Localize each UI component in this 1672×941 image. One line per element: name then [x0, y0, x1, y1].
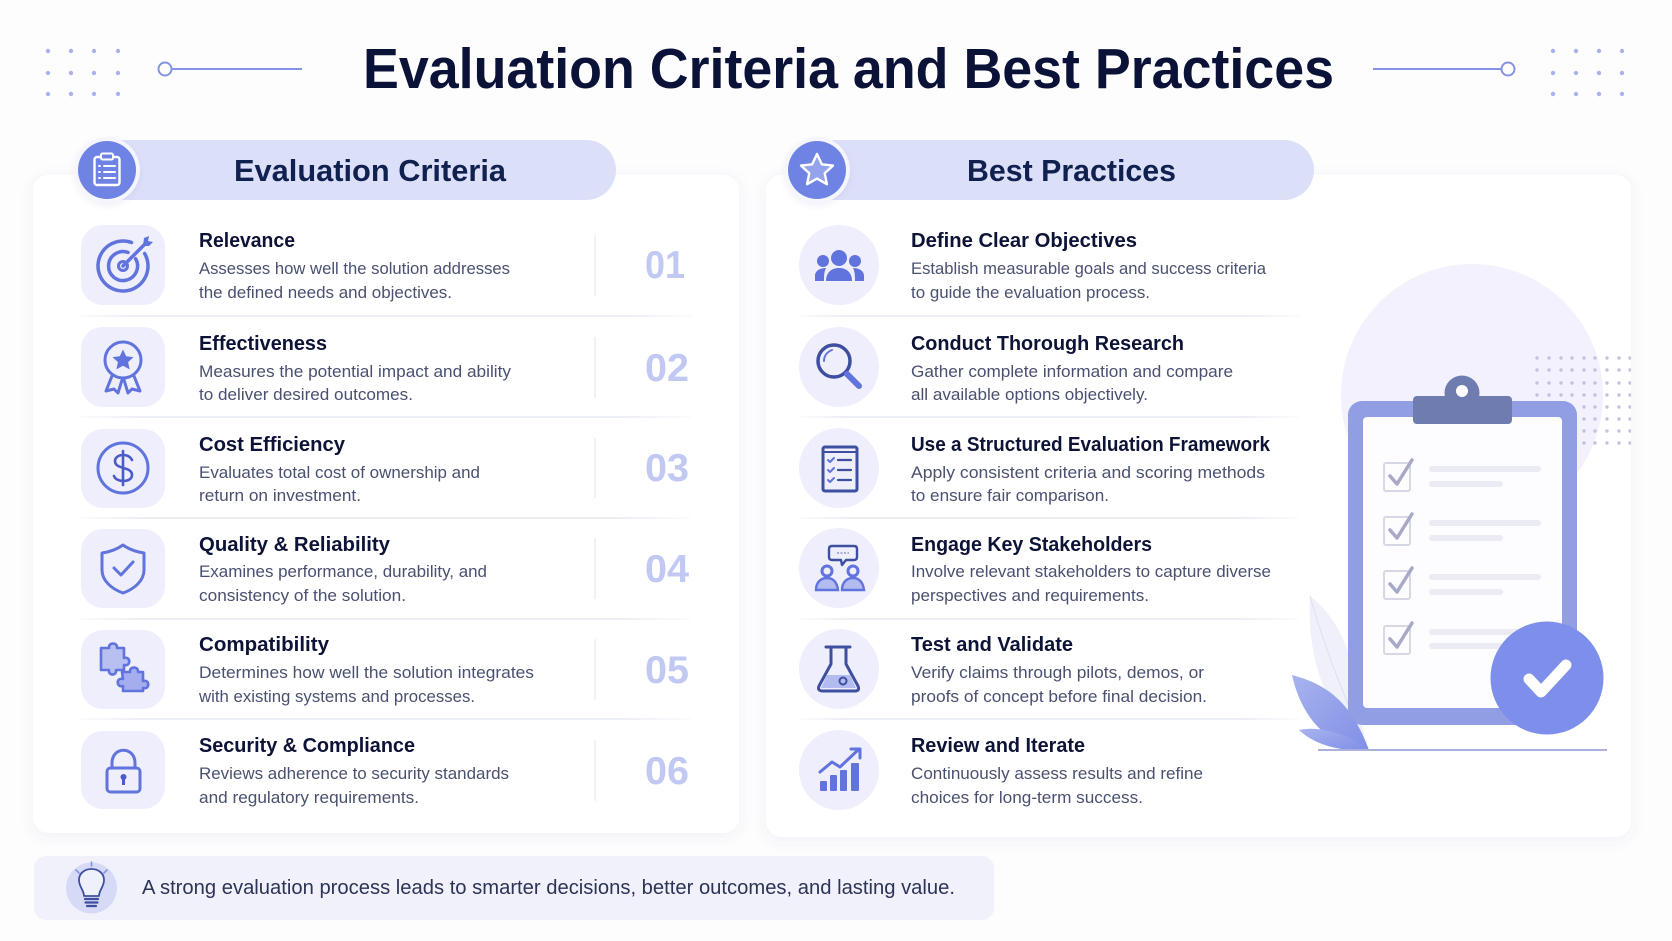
criterion: compatibility: Determines how well the solution integrates [199, 664, 534, 682]
decoration: left dots and line [46, 49, 302, 96]
criterion: relevance: 01 [645, 244, 685, 287]
icon: target [98, 236, 153, 291]
criterion: effectiveness: Measures the potential impact and ability [199, 363, 512, 381]
practice: test and validate [799, 629, 1207, 709]
icon: light bulb [66, 862, 117, 914]
icon: magnifier [818, 345, 859, 386]
criterion: cost efficiency: return on investment. [199, 487, 361, 505]
criterion: compatibility: 05 [645, 649, 689, 692]
icon: growth chart [820, 749, 860, 791]
icon: award [105, 342, 141, 393]
practice: test and validate: proofs of concept before final decision. [911, 688, 1207, 706]
criterion: relevance [81, 225, 685, 305]
criterion: quality and reliability [81, 529, 689, 608]
title: Evaluation Criteria and Best Practices [363, 37, 1334, 101]
practice: define clear objectives [799, 225, 1267, 305]
criterion: security and compliance: Security & Compliance [199, 734, 415, 757]
practice: review and iterate [799, 730, 1203, 810]
callout: footer takeaway: A strong evaluation process leads to smarter decisions, better outcomes, and lasting value. [142, 877, 955, 899]
decoration: right dots and line [1373, 49, 1624, 96]
practice: define clear objectives: Define Clear Objectives [911, 229, 1137, 252]
criterion: compatibility [81, 630, 689, 709]
practice: define clear objectives: to guide the evaluation process. [911, 284, 1150, 302]
practice: define clear objectives: Establish measurable goals and success criteria [911, 260, 1267, 278]
criterion: effectiveness: Effectiveness [199, 332, 327, 355]
criterion: cost efficiency: Cost Efficiency [199, 433, 346, 456]
criterion: effectiveness: 02 [645, 347, 689, 390]
criterion: effectiveness: to deliver desired outcomes. [199, 386, 413, 404]
practice: engage key stakeholders: perspectives and requirements. [911, 587, 1149, 605]
criterion: security and compliance [81, 731, 689, 809]
practice: engage key stakeholders: Involve relevant stakeholders to capture diverse [911, 563, 1271, 581]
heading: best practices pill [784, 137, 1314, 203]
practice: conduct thorough research [799, 327, 1233, 407]
criterion: compatibility: with existing systems and processes. [198, 688, 475, 706]
icon: stakeholders [816, 546, 864, 590]
criterion: cost efficiency [81, 429, 689, 508]
icon: flask [818, 647, 859, 691]
criterion: compatibility: Compatibility [199, 633, 330, 656]
practice: use a structured evaluation framework: Use a Structured Evaluation Framework [911, 433, 1271, 456]
practice: test and validate: Test and Validate [911, 633, 1073, 656]
criterion: security and compliance: Reviews adherence to security standards [199, 765, 509, 783]
criterion: quality and reliability: Quality & Reliability [199, 533, 391, 556]
criterion: relevance: Relevance [199, 229, 295, 252]
practice: engage key stakeholders: Engage Key Stakeholders [911, 533, 1152, 556]
practice: engage key stakeholders [799, 528, 1271, 608]
icon: shield [102, 545, 144, 593]
icon: puzzle pieces [101, 644, 148, 691]
practice: test and validate: Verify claims through pilots, demos, or [911, 664, 1205, 682]
icon: dollar coin [98, 443, 148, 493]
panel: best practices [766, 137, 1632, 837]
criterion: cost efficiency: 03 [645, 447, 689, 490]
practice: review and iterate: Continuously assess results and refine [911, 765, 1203, 783]
heading: evaluation criteria pill [74, 137, 616, 203]
criterion: security and compliance: and regulatory requirements. [199, 789, 419, 807]
criterion: relevance: the defined needs and objectives. [199, 284, 452, 302]
practice: conduct thorough research: Gather complete information and compare [911, 363, 1233, 381]
icon: padlock [107, 750, 140, 792]
practice: review and iterate: Review and Iterate [911, 734, 1085, 757]
practice: conduct thorough research: Conduct Thorough Research [911, 332, 1184, 355]
heading: evaluation criteria pill: Evaluation Criteria [234, 153, 507, 188]
panel: evaluation criteria [33, 137, 739, 833]
icon: checklist [823, 447, 857, 491]
criterion: security and compliance: 06 [645, 750, 689, 793]
criterion: quality and reliability: Examines performance, durability, and [199, 563, 487, 581]
criterion: effectiveness [81, 327, 689, 407]
practice: use a structured evaluation framework: to ensure fair comparison. [911, 487, 1109, 505]
criterion: cost efficiency: Evaluates total cost of ownership and [199, 464, 480, 482]
icon: people [815, 250, 864, 281]
heading: best practices pill: Best Practices [967, 153, 1176, 188]
criterion: relevance: Assesses how well the solution addresses [199, 260, 510, 278]
practice: conduct thorough research: all available options objectively. [911, 386, 1148, 404]
callout: footer takeaway [34, 856, 994, 920]
criterion: quality and reliability: consistency of the solution. [199, 587, 406, 605]
practice: use a structured evaluation framework [799, 428, 1271, 508]
criterion: quality and reliability: 04 [645, 548, 689, 591]
illustration: clipboard with check [1292, 264, 1632, 750]
practice: use a structured evaluation framework: Apply consistent criteria and scoring methods [911, 464, 1265, 482]
practice: review and iterate: choices for long-term success. [911, 789, 1143, 807]
